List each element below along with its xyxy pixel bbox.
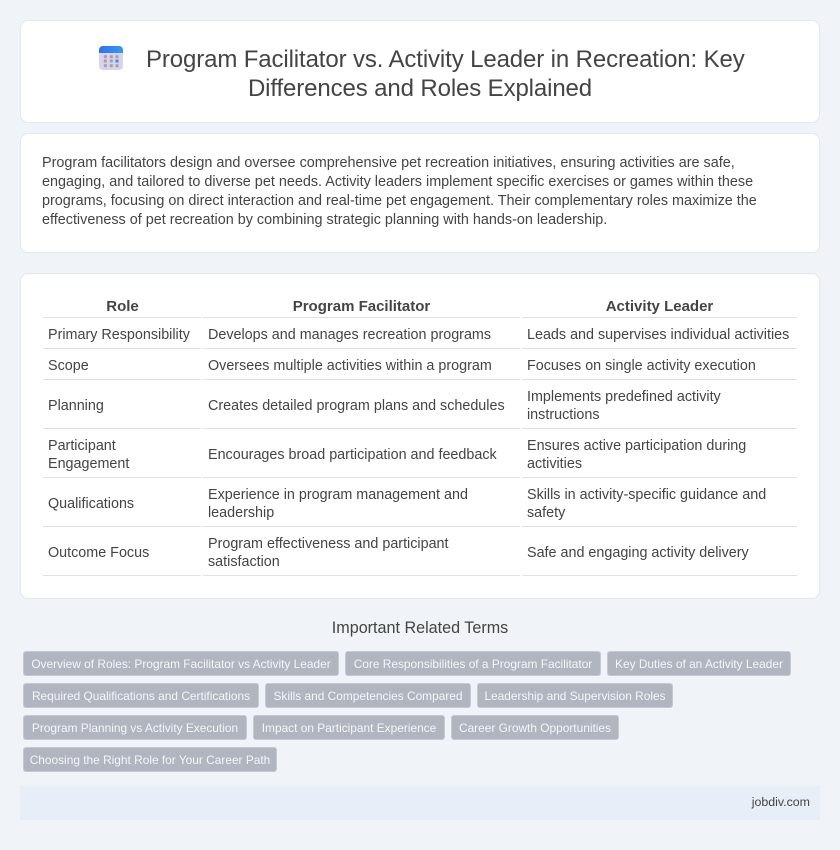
row: scope: Focuses on single activity execution	[527, 358, 756, 374]
title: Program Facilitator vs. Activity Leader in Recreation: Key	[146, 46, 745, 73]
row: planning: instructions	[527, 407, 600, 423]
row: primary responsibility	[48, 327, 789, 343]
row: qualifications: Skills in activity-specific guidance and	[527, 487, 766, 503]
row: primary responsibility: Primary Responsibility	[48, 327, 190, 343]
intro paragraph: Program facilitators design and oversee comprehensive pet recreation initiatives, ensuring activities are safe,	[42, 155, 735, 171]
related term tags: Leadership and Supervision Roles	[484, 689, 666, 703]
related term tags: Choosing the Right Role for Your Career Path	[30, 753, 270, 767]
intro paragraph	[42, 155, 757, 228]
related term tags	[23, 651, 791, 772]
row: primary responsibility: Develops and manages recreation programs	[208, 327, 491, 343]
table header: Program Facilitator	[293, 298, 430, 315]
intro paragraph: effectiveness of pet recreation by combining strategic planning with hands-on leadership.	[42, 212, 607, 228]
title	[146, 46, 745, 102]
footer bar	[20, 786, 820, 820]
title: Differences and Roles Explained	[248, 75, 592, 102]
panel: title card	[20, 20, 820, 123]
intro paragraph: programs, focusing on direct interaction and real-time pet engagement. Their complementary roles maximize the	[42, 193, 757, 209]
related term tags: Overview of Roles: Program Facilitator vs Activity Leader	[31, 657, 331, 671]
panel: comparison table	[20, 273, 820, 599]
panel: intro text	[20, 133, 820, 253]
row: outcome focus: Safe and engaging activity delivery	[527, 545, 749, 561]
row: qualifications: leadership	[208, 505, 274, 521]
related term tags: Key Duties of an Activity Leader	[615, 657, 783, 671]
footer credit: jobdiv.com	[752, 795, 810, 809]
related term tags: Impact on Participant Experience	[262, 721, 436, 735]
row: participant engagement	[48, 438, 746, 472]
row: participant engagement: Ensures active participation during	[527, 438, 746, 454]
related term tags: Skills and Competencies Compared	[273, 689, 463, 703]
row: planning	[48, 389, 721, 423]
related term tags: Career Growth Opportunities	[459, 721, 611, 735]
row: scope	[48, 358, 756, 374]
heading: related terms: Important Related Terms	[332, 619, 508, 637]
icon: calendar	[99, 46, 123, 70]
table header: Role	[106, 298, 139, 315]
row: planning: Implements predefined activity	[527, 389, 721, 405]
row: qualifications	[48, 487, 766, 521]
row: scope: Oversees multiple activities within a program	[208, 358, 492, 374]
row: scope: Scope	[48, 358, 89, 374]
row: primary responsibility: Leads and supervises individual activities	[527, 327, 789, 343]
related term tags: Program Planning vs Activity Execution	[32, 721, 238, 735]
row: participant engagement: Participant	[48, 438, 116, 454]
row: qualifications: safety	[527, 505, 565, 521]
table header	[106, 298, 713, 315]
row: outcome focus	[48, 536, 749, 570]
row: participant engagement: Engagement	[48, 456, 129, 472]
row: planning: Planning	[48, 398, 104, 414]
related term tags: Required Qualifications and Certifications	[32, 689, 250, 703]
row: qualifications: Experience in program management and	[208, 487, 468, 503]
row: outcome focus: satisfaction	[208, 554, 280, 570]
row: outcome focus: Program effectiveness and participant	[208, 536, 449, 552]
row: outcome focus: Outcome Focus	[48, 545, 149, 561]
row: participant engagement: activities	[527, 456, 582, 472]
row: qualifications: Qualifications	[48, 496, 134, 512]
table header: Activity Leader	[606, 298, 713, 315]
row: planning: Creates detailed program plans and schedules	[208, 398, 505, 414]
row: participant engagement: Encourages broad participation and feedback	[208, 447, 497, 463]
related term tags: Core Responsibilities of a Program Facilitator	[354, 657, 592, 671]
intro paragraph: engaging, and tailored to diverse pet needs. Activity leaders implement specific exercises or games within these	[42, 174, 753, 190]
